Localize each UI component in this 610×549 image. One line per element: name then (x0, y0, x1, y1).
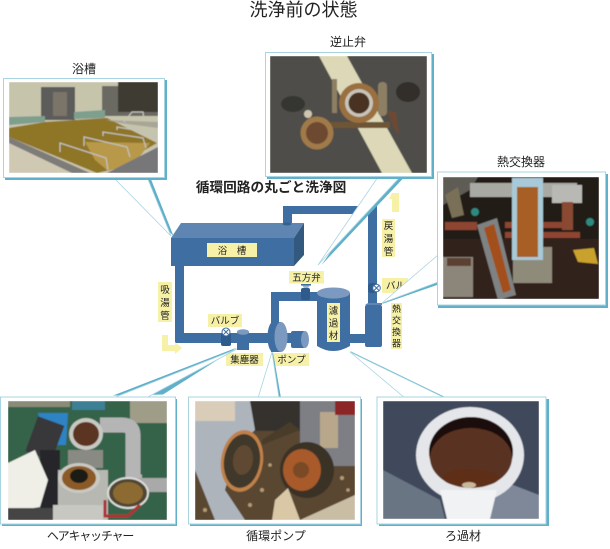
label: return pipe: 管 (384, 246, 394, 258)
valve lower (221, 328, 231, 346)
label: return pipe: 湯 (384, 233, 394, 245)
diagram heading: 循環回路の丸ごと洗浄図 (196, 179, 346, 195)
caption: ろ過材 (445, 529, 481, 543)
bath label: 浴 槽 (218, 245, 247, 257)
filter label: 材 (329, 330, 339, 342)
bath tank (171, 222, 304, 266)
label: pump (274, 353, 309, 366)
label: pump: ポンプ (277, 355, 306, 366)
title: 洗浄前の状態 (250, 0, 358, 20)
label: return pipe: 戻 (384, 221, 393, 232)
dust collector (237, 329, 249, 350)
photo (270, 56, 427, 173)
arrow: suction flow (162, 335, 182, 354)
label: heat exchanger: 熱 (392, 304, 401, 314)
label: suction pipe: 湯 (160, 297, 170, 309)
filter label: 濾 (329, 306, 338, 317)
label: heat exchanger: 換 (392, 326, 401, 337)
photo (9, 82, 158, 173)
filter label (327, 303, 340, 342)
photo frame (0, 397, 177, 526)
label: valve right (382, 278, 415, 293)
arrow: return flow (389, 193, 399, 212)
panel: hair catcher photo (0, 397, 177, 543)
caption: 逆止弁 (330, 34, 366, 49)
photo (195, 401, 355, 520)
photo frame (377, 397, 549, 526)
photo (383, 401, 539, 519)
label: suction pipe: 吸 (160, 285, 170, 296)
photo (443, 177, 599, 300)
label: valve: バルブ (211, 315, 240, 327)
five-way valve (301, 284, 311, 300)
label: dust collector: 集塵器 (230, 354, 259, 366)
pump (268, 322, 309, 352)
heat exchanger (365, 303, 382, 347)
photo frame (438, 172, 608, 308)
label: five-way valve: 五方弁 (292, 272, 321, 284)
label: heat exchanger (391, 303, 402, 349)
valve upper (368, 283, 380, 293)
pipes (175, 206, 377, 343)
panel: bathtub photo (4, 62, 167, 180)
panel: heat exchanger photo (438, 155, 608, 308)
caption: ヘアキャッチャー (47, 529, 133, 543)
photo frame (4, 78, 167, 180)
label: return pipe (382, 219, 395, 258)
callout tails (113, 177, 445, 398)
label: valve right: バルブ (386, 280, 415, 292)
label: suction pipe: 管 (160, 310, 170, 322)
caption: 循環ポンプ (246, 529, 306, 543)
caption: 浴槽 (72, 62, 96, 76)
label: dust collector (226, 353, 263, 366)
label: five-way valve (289, 271, 324, 284)
panel: circulation pump photo (188, 397, 362, 543)
circulation diagram (158, 193, 415, 366)
photo frame (266, 52, 434, 179)
label: heat exchanger: 器 (392, 338, 401, 348)
filter vessel (317, 288, 350, 351)
caption: 熱交換器 (497, 155, 545, 169)
label: heat exchanger: 交 (392, 316, 401, 326)
label: suction pipe (158, 282, 172, 322)
bath label (207, 243, 257, 257)
filter label: 過 (329, 318, 339, 330)
photo frame (188, 397, 362, 526)
panel: filter media photo (377, 397, 549, 543)
photo (8, 401, 167, 520)
panel: check valve photo (266, 34, 434, 179)
